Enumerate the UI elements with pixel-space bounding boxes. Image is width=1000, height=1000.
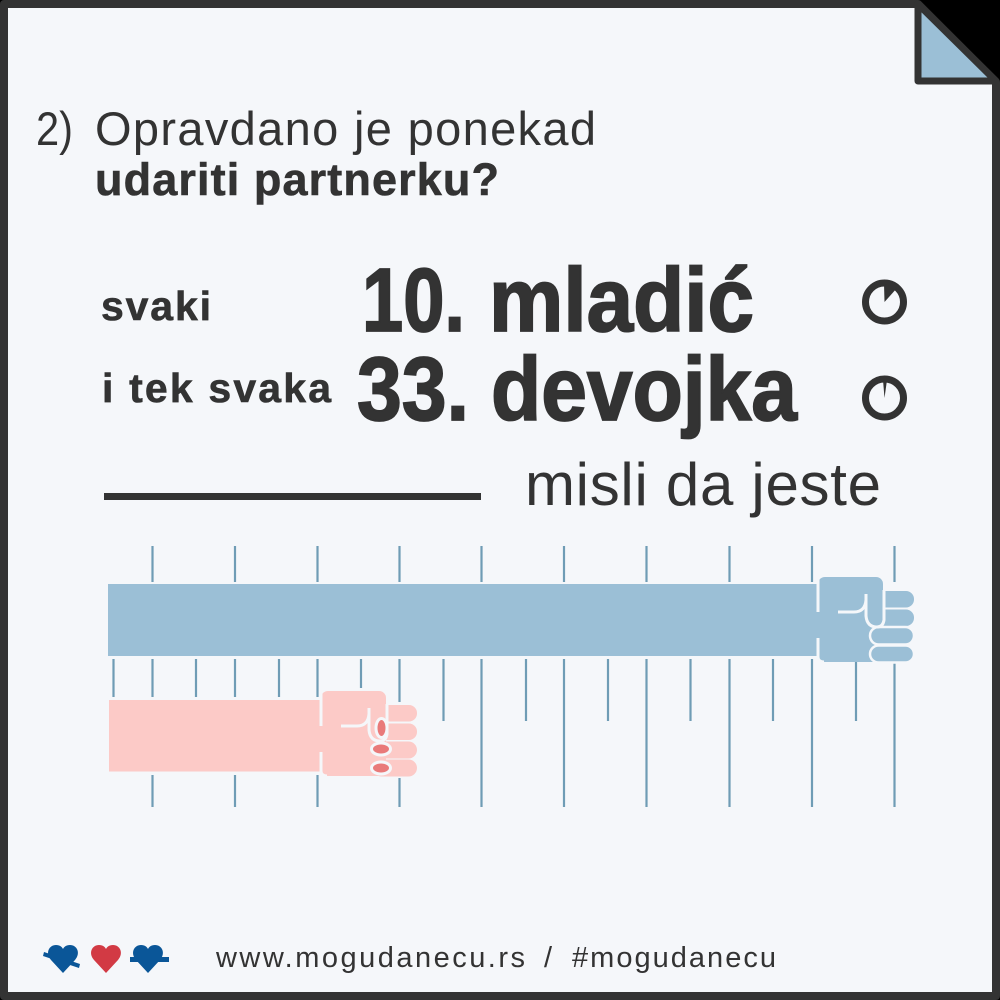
statistic row: young women: i tek svaka: [102, 365, 332, 411]
statistic row: young women: devojka: [491, 340, 798, 440]
icon: heart with arrow, tilted: [43, 945, 80, 973]
legend text: misli da jeste: [525, 451, 881, 518]
footer links: [215, 942, 776, 974]
footer links: /: [544, 942, 553, 974]
footer links: #mogudanecu: [572, 942, 776, 974]
chart scale ticks: [114, 546, 894, 807]
question heading: 2): [36, 102, 73, 155]
statistic row: young men: 10.: [362, 251, 465, 351]
nail: middle finger: [372, 743, 390, 755]
footer links: www.mogudanecu.rs: [215, 942, 525, 974]
nail: index finger: [376, 718, 387, 738]
legend rule: [104, 493, 481, 500]
bar: young women arm with fist: [109, 691, 417, 776]
icon: pie dial one tenth: [866, 283, 904, 321]
statistic row: young men: [101, 251, 754, 351]
icon: red heart: [91, 945, 121, 973]
statistic row: young women: 33.: [357, 340, 469, 440]
question heading: [36, 102, 596, 205]
nail: ring finger: [372, 762, 390, 774]
bar: young men arm with fist: [108, 577, 914, 662]
statistic row: young men: mladić: [489, 251, 754, 351]
icon: pie dial one thirty-third: [866, 379, 904, 417]
statistic row: young women: [102, 340, 798, 440]
icon: heart with arrow, horizontal: [130, 945, 169, 973]
statistic row: young men: svaki: [101, 283, 211, 329]
question heading: Opravdano je ponekad: [95, 102, 596, 155]
question heading: udariti partnerku?: [95, 154, 499, 205]
